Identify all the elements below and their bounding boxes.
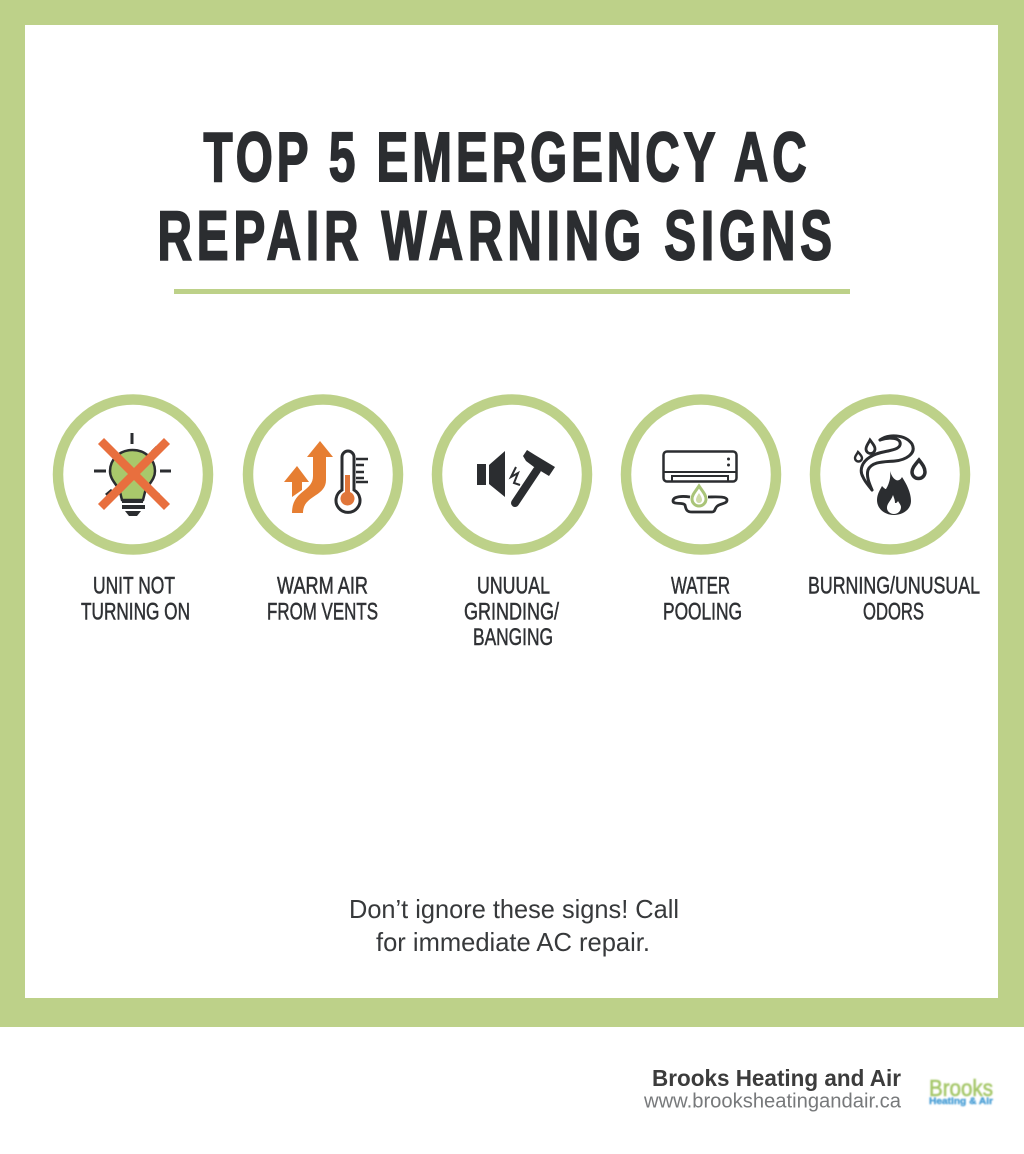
label: warm air from vents: WARM AIR	[277, 572, 368, 600]
footer: company name and website	[643, 1065, 902, 1112]
label: water pooling: POOLING	[663, 598, 742, 626]
ring 4	[626, 400, 776, 550]
title	[158, 118, 832, 275]
label: unit not turning on: TURNING ON	[81, 598, 190, 626]
icon: warm air arrows and thermometer	[284, 441, 368, 513]
panel: warm air from vents	[248, 400, 398, 626]
footer logo: Heating & Air	[929, 1096, 994, 1106]
footer logo: Brooks	[929, 1075, 993, 1101]
panel: burning or unusual odors	[808, 400, 980, 626]
label: unit not turning on	[81, 572, 190, 626]
label: unusual grinding or banging	[464, 572, 559, 651]
label: unit not turning on: UNIT NOT	[93, 572, 175, 600]
label: water pooling	[663, 572, 742, 626]
label: unusual grinding or banging: BANGING	[473, 624, 553, 651]
icon: crossed out light bulb	[94, 433, 171, 516]
footer: company name and website: www.brooksheatingandair.ca	[643, 1090, 902, 1112]
call to action text	[349, 894, 679, 957]
label: burning or unusual odors	[808, 572, 980, 626]
ring 2	[248, 400, 398, 550]
label: unusual grinding or banging: GRINDING/	[464, 598, 559, 626]
call to action text: Don’t ignore these signs! Call	[349, 894, 679, 924]
label: water pooling: WATER	[671, 572, 730, 600]
icon: speaker and hammer	[477, 450, 555, 503]
title underline	[174, 289, 850, 294]
panel: unusual grinding or banging	[437, 400, 587, 651]
ring 3	[437, 400, 587, 550]
title: TOP 5 EMERGENCY AC	[204, 118, 807, 196]
call to action text: for immediate AC repair.	[376, 927, 650, 957]
icon: AC unit with water puddle	[664, 452, 736, 512]
panel: water pooling	[626, 400, 776, 626]
label: warm air from vents	[267, 572, 378, 626]
panel: unit not turning on	[58, 400, 208, 626]
ring 5	[815, 400, 965, 550]
footer: company name and website: Brooks Heating and Air	[652, 1065, 901, 1091]
ring 1	[58, 400, 208, 550]
icon: smoke, drops and flame	[855, 436, 925, 515]
label: unusual grinding or banging: UNUUAL	[477, 572, 550, 600]
title: REPAIR WARNING SIGNS	[158, 196, 832, 275]
label: burning or unusual odors: ODORS	[863, 598, 924, 626]
label: warm air from vents: FROM VENTS	[267, 598, 378, 626]
